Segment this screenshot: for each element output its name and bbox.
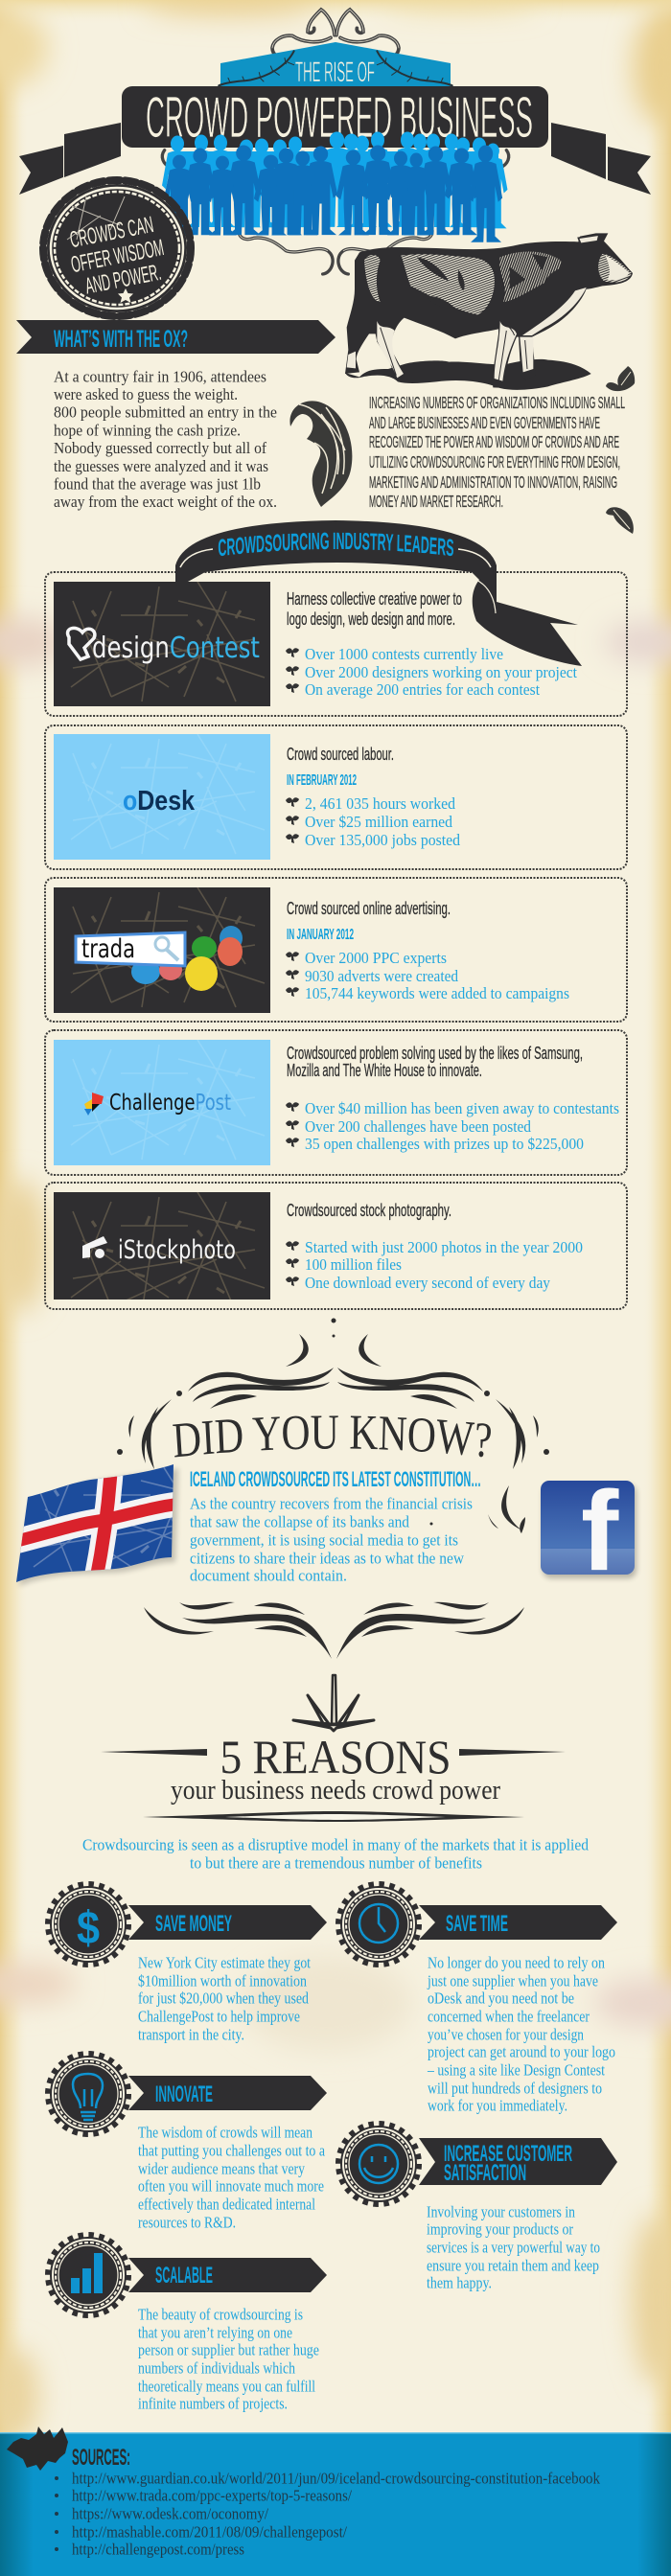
source list: http://www.trada.com/ppc-experts/top-5-reasons/	[72, 2486, 352, 2505]
facts: Over 200 challenges have been posted	[305, 1117, 532, 1136]
source list	[55, 2469, 601, 2559]
ribbon: industry leaders	[175, 520, 582, 666]
logo text: ChallengePost	[109, 1091, 231, 1116]
text: transport in the city.	[138, 2026, 244, 2043]
description: Crowdsourced stock photography.	[287, 1201, 451, 1220]
facts	[286, 949, 569, 1002]
logo mark	[84, 1092, 104, 1116]
did you know flourish: top	[117, 1334, 549, 1533]
benefits intro: Crowdsourcing is seen as a disruptive model in many of the markets that it is applied	[82, 1836, 590, 1853]
heading: SAVE TIME	[446, 1911, 508, 1937]
benefits intro: to but there are a tremendous number of benefits	[190, 1853, 482, 1873]
panel: trada	[45, 878, 627, 1022]
text: New York City estimate they got	[138, 1953, 311, 1972]
text: oDesk and you need not be	[428, 1990, 574, 2007]
description: Crowd sourced labour.	[287, 745, 394, 764]
text: improving your products or	[427, 2220, 573, 2239]
panel: ChallengePost	[45, 1030, 627, 1175]
logo mark: heart	[68, 628, 95, 659]
facts: 9030 adverts were created	[305, 967, 459, 985]
facts: 35 open challenges with prizes up to $225,000	[305, 1135, 584, 1153]
intro paragraph	[369, 393, 625, 511]
iceland text: As the country recovers from the financial crisis	[190, 1495, 473, 1512]
text: resources to R&D.	[138, 2214, 236, 2231]
text: that you aren’t relying on one	[138, 2323, 292, 2342]
badge banner	[128, 1905, 327, 1940]
stamp: crowds can offer wisdom	[43, 180, 191, 316]
date label: IN JANUARY 2012	[287, 927, 354, 943]
text: ChallengePost to help improve	[138, 2007, 300, 2026]
did you know flourish: bottom	[144, 1602, 524, 1659]
text: The beauty of crowdsourcing is	[138, 2306, 303, 2323]
icon: bars	[71, 2253, 103, 2293]
description: Harness collective creative power to	[287, 589, 462, 609]
text: project can get around to your logo	[428, 2043, 615, 2060]
logo text: iStockphoto	[118, 1235, 236, 1265]
badge	[48, 2235, 128, 2315]
banner: what's with the ox	[16, 320, 336, 354]
text: services is a very powerful way to	[427, 2239, 600, 2256]
panel: oDesk: IN FEBRUARY 2012	[287, 772, 357, 789]
badge banner	[419, 2138, 617, 2185]
logo text: oDesk	[123, 786, 196, 816]
facts: Over $25 million earned	[305, 813, 453, 831]
text	[427, 1953, 615, 2114]
icon: facebook	[541, 1468, 636, 1595]
search box: trada	[81, 934, 135, 964]
facts: Over 1000 contests currently live	[305, 645, 503, 663]
text: – using a site like Design Contest	[427, 2060, 605, 2080]
icon: iceland flag	[16, 1464, 180, 1587]
text: concerned when the freelancer	[428, 2007, 590, 2026]
text	[427, 2202, 600, 2292]
logo card: iStockphoto	[54, 1192, 270, 1300]
panel: iStockphoto	[45, 1183, 627, 1312]
heading: 5 reasons: 5 REASONS	[220, 1730, 451, 1783]
iceland text: citizens to share their ideas as to what the new	[190, 1549, 464, 1568]
description	[287, 589, 462, 629]
facts: Over $40 million has been given away to contestants	[305, 1099, 619, 1117]
ox texture	[347, 235, 632, 381]
ox story text	[54, 368, 277, 511]
badge banner	[128, 2258, 327, 2292]
reason: scalable: SCALABLE	[155, 2263, 213, 2288]
panel: sources footer	[0, 2426, 671, 2576]
reason: innovate: INNOVATE	[155, 2082, 213, 2107]
ox story text: the guesses were analyzed and it was	[54, 457, 268, 475]
ox story text: found that the average was just 1lb	[54, 475, 261, 493]
facts: 105,744 keywords were added to campaigns	[305, 984, 569, 1002]
heading: 5 reasons	[101, 1730, 566, 1783]
panel: oDesk	[45, 725, 627, 869]
text: The wisdom of crowds will mean	[138, 2124, 312, 2141]
fan ornament	[293, 1675, 374, 1731]
facts: Over 135,000 jobs posted	[305, 831, 461, 849]
heading: did you know: DID YOU KNOW?	[173, 1415, 491, 1457]
reason: scalable	[48, 2235, 327, 2413]
text	[138, 1953, 311, 2043]
badge	[48, 2054, 128, 2134]
ox story text: At a country fair in 1906, attendees	[54, 368, 266, 385]
reason: increase customer satisfaction	[338, 2124, 617, 2292]
ox body	[345, 233, 633, 388]
facts	[286, 645, 577, 699]
description: logo design, web design and more.	[287, 610, 455, 629]
facts	[286, 1099, 619, 1153]
source list: http://www.guardian.co.uk/world/2011/jun/09/iceland-crowdsourcing-constitution-facebook	[72, 2469, 601, 2488]
source list: http://mashable.com/2011/08/09/challengepost/	[72, 2522, 347, 2542]
icon: dollar: $	[77, 1903, 100, 1954]
text: WHAT’S WITH THE OX?	[54, 326, 188, 353]
facts	[286, 794, 461, 849]
source list: http://challengepost.com/press	[72, 2540, 244, 2559]
header ornament	[162, 10, 509, 274]
facts: One download every second of every day	[305, 1274, 551, 1292]
text: THE RISE OF	[295, 57, 375, 88]
title ribbon	[19, 86, 651, 195]
heading	[444, 2141, 572, 2186]
text: person or supplier but rather huge	[138, 2340, 319, 2359]
text: will put hundreds of designers to	[428, 2080, 602, 2097]
ox story text: 800 people submitted an entry in the	[54, 402, 277, 422]
ox story text: hope of winning the cash prize.	[54, 422, 241, 439]
stamp: crowds can offer wisdom: AND POWER.	[83, 260, 163, 300]
heading: SATISFACTION	[444, 2160, 526, 2186]
text: just one supplier when you have	[427, 1972, 598, 1990]
description	[287, 1044, 583, 1080]
ox story text: were asked to guess the weight.	[54, 385, 238, 403]
icon: light bulb	[73, 2074, 103, 2120]
blue shield behind title	[220, 42, 451, 86]
facts: Started with just 2000 photos in the year 2000	[305, 1238, 583, 1256]
icon: facebook: f	[581, 1468, 619, 1595]
benefits intro	[82, 1836, 590, 1873]
facts: Over 2000 PPC experts	[305, 949, 447, 967]
facts: 2, 461 035 hours worked	[305, 794, 456, 813]
badge banner	[419, 1905, 617, 1940]
logo card: designContest	[54, 582, 270, 706]
text: for just $20,000 when they used	[138, 1990, 310, 2007]
description: Crowd sourced online advertising.	[287, 899, 451, 918]
small leaf ornaments	[606, 366, 635, 534]
coloured eggs	[131, 926, 243, 991]
iceland text: that saw the collapse of its banks and	[190, 1512, 410, 1531]
text: infinite numbers of projects.	[138, 2394, 288, 2413]
logo card: trada	[54, 887, 270, 1013]
text: No longer do you need to rely on	[428, 1953, 605, 1972]
crowd silhouettes	[162, 131, 507, 242]
divider dot	[332, 1319, 336, 1322]
iceland text	[190, 1495, 473, 1585]
facts	[286, 1238, 583, 1292]
logo mark	[82, 1236, 107, 1258]
panel: designContest	[45, 572, 627, 716]
text: wider audience means that very	[138, 2160, 306, 2177]
logo card: oDesk	[54, 734, 270, 860]
logo card: ChallengePost	[54, 1040, 270, 1165]
text: that putting you challenges out to a	[138, 2141, 326, 2160]
text: work for you immediately.	[428, 2097, 567, 2114]
reason: innovate	[48, 2054, 327, 2231]
icon: smiley	[359, 2145, 398, 2183]
stamp: crowds can offer wisdom: CROWDS CAN	[68, 212, 155, 253]
ox shadow	[345, 359, 591, 390]
source list: https://www.odesk.com/oconomy/	[72, 2505, 268, 2522]
divider: lens	[143, 1811, 524, 1822]
logo text: designContest	[92, 632, 260, 665]
badge	[338, 1884, 419, 1965]
badge banner	[128, 2076, 327, 2110]
icon: clock	[359, 1904, 398, 1943]
text: Involving your customers in	[427, 2202, 575, 2221]
heading: SAVE MONEY	[155, 1911, 232, 1937]
iceland text: document should contain.	[190, 1566, 347, 1585]
text: you’ve chosen for your design	[428, 2026, 584, 2043]
text: them happy.	[427, 2273, 492, 2292]
text: $10million worth of innovation	[138, 1972, 307, 1990]
facts: On average 200 entries for each contest	[305, 680, 540, 699]
text: numbers of individuals which	[138, 2359, 296, 2377]
scroll ornament	[289, 401, 352, 507]
heading: crowdsourcing industry leaders: CROWDSOURCING INDUSTRY LEADERS	[219, 533, 453, 556]
header ornament: vines over shield	[219, 51, 452, 85]
iceland text: government, it is using social media to get its	[190, 1531, 458, 1549]
text: effectively than dedicated internal	[138, 2195, 315, 2214]
icon: feather leaf	[7, 2426, 68, 2471]
ox story text: away from the exact weight of the ox.	[54, 493, 277, 511]
engraved ox	[345, 233, 633, 390]
reason: save time	[338, 1884, 617, 2114]
intro paragraph: MONEY AND MARKET RESEARCH.	[369, 492, 503, 511]
text: theoretically means you can fulfill	[138, 2377, 315, 2396]
panel: sources footer: SOURCES:	[72, 2445, 130, 2471]
text	[138, 2306, 319, 2413]
facts: 100 million files	[305, 1255, 402, 1274]
stamp: crowds can offer wisdom: OFFER WISDOM	[69, 235, 166, 278]
description: Mozilla and The White House to innovate.	[287, 1061, 482, 1080]
search box	[76, 932, 185, 966]
badge	[48, 1884, 128, 1965]
facts: Over 2000 designers working on your project	[305, 663, 577, 681]
badge	[338, 2124, 419, 2204]
text: ensure you retain them and keep	[427, 2256, 599, 2275]
reason: save money	[48, 1884, 327, 2043]
heading: did you know	[173, 1415, 491, 1457]
subheading: your business needs crowd power	[171, 1775, 500, 1806]
text	[138, 2124, 326, 2231]
text: often you will innovate much more	[138, 2177, 324, 2195]
ox story text: Nobody guessed correctly but all of	[54, 439, 266, 457]
